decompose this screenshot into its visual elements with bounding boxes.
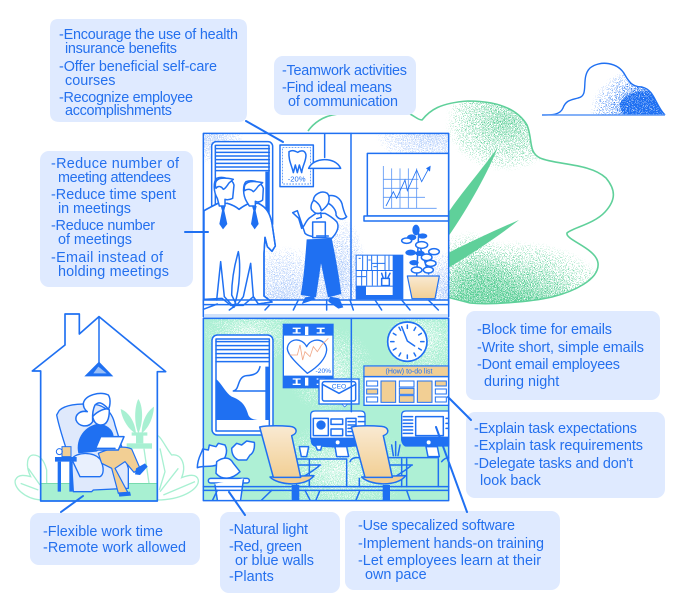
floor planks bbox=[203, 487, 449, 500]
whiteboard chart bbox=[364, 153, 449, 221]
text box: meetings bbox=[40, 151, 193, 287]
text box: flexible work: -Flexible work time bbox=[43, 524, 163, 540]
text box: tasks bbox=[466, 412, 665, 498]
lower floor of office bbox=[196, 314, 450, 502]
computer monitor left bbox=[311, 411, 365, 457]
text box: training bbox=[345, 511, 560, 590]
house outline bbox=[32, 314, 166, 501]
orange chairs bbox=[260, 426, 412, 500]
text box: employee benefits: courses bbox=[65, 73, 115, 89]
poster: tooth: -20% bbox=[288, 175, 306, 184]
desks and legs bbox=[297, 458, 449, 487]
text box: flexible work bbox=[30, 513, 200, 565]
two men in shirts and ties bbox=[204, 177, 275, 307]
connector lines bbox=[61, 121, 471, 515]
armchair bbox=[57, 404, 128, 492]
text box: employee benefits: insurance benefits bbox=[65, 41, 177, 57]
computer monitor right bbox=[402, 411, 449, 457]
text box: emails: -Write short, simple emails bbox=[477, 340, 644, 356]
coffee cup and desk plant bbox=[299, 442, 400, 457]
text box: employee benefits: -Encourage the use of health bbox=[59, 27, 238, 43]
woman with laptop bbox=[76, 393, 148, 497]
CEO email speech bubble bbox=[319, 379, 359, 407]
text box: emails: during night bbox=[484, 374, 559, 390]
text box: teamwork: -Teamwork activities bbox=[282, 63, 407, 79]
poster: heart bbox=[283, 324, 333, 388]
text box: meetings: in meetings bbox=[58, 201, 131, 217]
text box: meetings: -Email instead of bbox=[51, 250, 164, 266]
text box: emails: -Block time for emails bbox=[477, 322, 612, 338]
window with landscape bbox=[212, 335, 273, 435]
bookshelf bbox=[356, 255, 403, 299]
wall clock bbox=[388, 322, 427, 361]
text box: employee benefits: accomplishments bbox=[65, 103, 172, 119]
text box: environment: -Plants bbox=[229, 569, 274, 585]
text box: tasks: -Explain task expectations bbox=[474, 421, 637, 437]
poster: tooth bbox=[280, 145, 313, 187]
text box: training: -Use specalized software bbox=[358, 518, 515, 534]
poster: heart: -20% bbox=[316, 368, 331, 375]
upper wall grain bbox=[204, 134, 448, 300]
potted plant bbox=[402, 225, 439, 299]
text box: employee benefits: -Offer beneficial self-care bbox=[59, 59, 217, 75]
text box: training: own pace bbox=[365, 567, 427, 583]
to-do list board bbox=[364, 366, 449, 405]
floor bbox=[41, 483, 157, 501]
text box: teamwork: -Find ideal means bbox=[282, 80, 392, 96]
text box: meetings: -Reduce number bbox=[51, 218, 155, 234]
monstera plant in pot bbox=[197, 441, 254, 502]
woman holding tablet bbox=[293, 192, 347, 309]
text box: meetings: of meetings bbox=[58, 232, 132, 248]
background potted plant bbox=[121, 399, 154, 483]
text box: teamwork bbox=[274, 56, 416, 115]
background bushes bbox=[15, 436, 198, 500]
text box: environment: -Red, green bbox=[229, 539, 302, 555]
green background blob bbox=[308, 100, 614, 304]
ceiling lamp bbox=[309, 134, 341, 168]
upper floor of office bbox=[202, 132, 450, 318]
text box: meetings: -Reduce time spent bbox=[51, 187, 176, 203]
text box: tasks: -Delegate tasks and don't bbox=[474, 456, 633, 472]
text box: training: -Implement hands-on training bbox=[358, 536, 544, 552]
text box: emails bbox=[466, 311, 660, 400]
text box: flexible work: -Remote work allowed bbox=[43, 540, 186, 556]
text box: employee benefits: -Recognize employee bbox=[59, 90, 193, 106]
text box: environment: -Natural light bbox=[229, 522, 308, 538]
text box: teamwork: of communication bbox=[288, 94, 398, 110]
CEO email speech bubble: CEO bbox=[332, 383, 346, 390]
text box: meetings: meeting attendees bbox=[58, 170, 171, 186]
text box: environment: or blue walls bbox=[235, 553, 314, 569]
window with blinds bbox=[212, 142, 273, 228]
text box: meetings: holding meetings bbox=[58, 264, 169, 280]
text box: tasks: -Explain task requirements bbox=[474, 438, 643, 454]
small cloud bbox=[542, 62, 666, 116]
green leaves bbox=[448, 147, 519, 268]
text box: tasks: look back bbox=[480, 473, 542, 489]
hanging lamp bbox=[84, 317, 113, 376]
text box: meetings: -Reduce number of bbox=[51, 156, 180, 172]
text box: environment bbox=[220, 512, 340, 593]
text box: training: -Let employees learn at their bbox=[358, 553, 541, 569]
house with remote worker bbox=[15, 314, 198, 501]
to-do list board: (How) to-do list bbox=[386, 369, 433, 376]
floor planks bbox=[203, 300, 449, 310]
side table with mug bbox=[55, 447, 77, 492]
text box: emails: -Dont email employees bbox=[477, 357, 620, 373]
text box: employee benefits bbox=[50, 19, 247, 122]
